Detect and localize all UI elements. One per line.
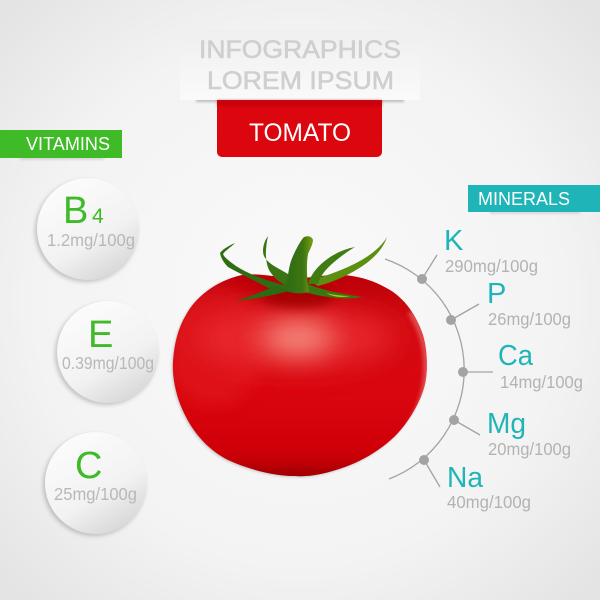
mineral Na	[447, 462, 531, 512]
mineral Mg: 20mg/100g	[488, 439, 571, 459]
tomato label: TOMATO	[249, 119, 351, 147]
mineral Ca: Ca	[498, 340, 534, 372]
title banner	[180, 30, 420, 102]
sepal far left	[220, 243, 288, 293]
vitamin B4: B	[63, 190, 88, 232]
mineral Ca: 14mg/100g	[500, 372, 583, 392]
mineral P	[487, 278, 571, 329]
vitamin E	[55, 301, 159, 405]
stem	[220, 236, 387, 301]
mineral Na: 40mg/100g	[447, 492, 531, 512]
vitamin E: 0.39mg/100g	[62, 353, 154, 373]
central stem	[284, 236, 313, 293]
mineral arc	[385, 255, 493, 487]
sepal lower right	[304, 284, 362, 298]
mineral Mg: Mg	[487, 408, 526, 440]
mineral P: P	[487, 278, 506, 310]
vitamin C: C	[75, 445, 102, 487]
title text: INFOGRAPHICS	[199, 36, 401, 64]
vitamin B4	[35, 178, 139, 282]
vitamin B4: 1.2mg/100g	[47, 230, 135, 250]
mineral K	[444, 225, 538, 276]
mineral P: 26mg/100g	[488, 309, 571, 329]
vitamins banner	[0, 130, 122, 160]
mineral K: K	[444, 225, 464, 257]
sepal upper left	[263, 236, 292, 288]
sepal right long	[308, 237, 387, 286]
sepal right mid	[308, 247, 355, 284]
mineral Na: Na	[447, 462, 484, 494]
mineral K: 290mg/100g	[445, 256, 538, 276]
vitamin C: 25mg/100g	[54, 484, 137, 504]
tomato label	[217, 100, 382, 157]
mineral Mg	[487, 408, 571, 459]
sepal lower left	[235, 286, 292, 301]
tomato	[165, 270, 435, 483]
title text	[199, 36, 401, 95]
minerals banner: MINERALS	[478, 189, 570, 209]
vitamin C	[43, 432, 147, 536]
title text: LOREM IPSUM	[207, 67, 394, 95]
vitamin E: E	[88, 314, 113, 356]
mineral Ca	[498, 340, 583, 392]
vitamin B4: 4	[92, 205, 104, 228]
minerals banner	[468, 185, 600, 214]
vitamins banner: VITAMINS	[26, 134, 110, 154]
